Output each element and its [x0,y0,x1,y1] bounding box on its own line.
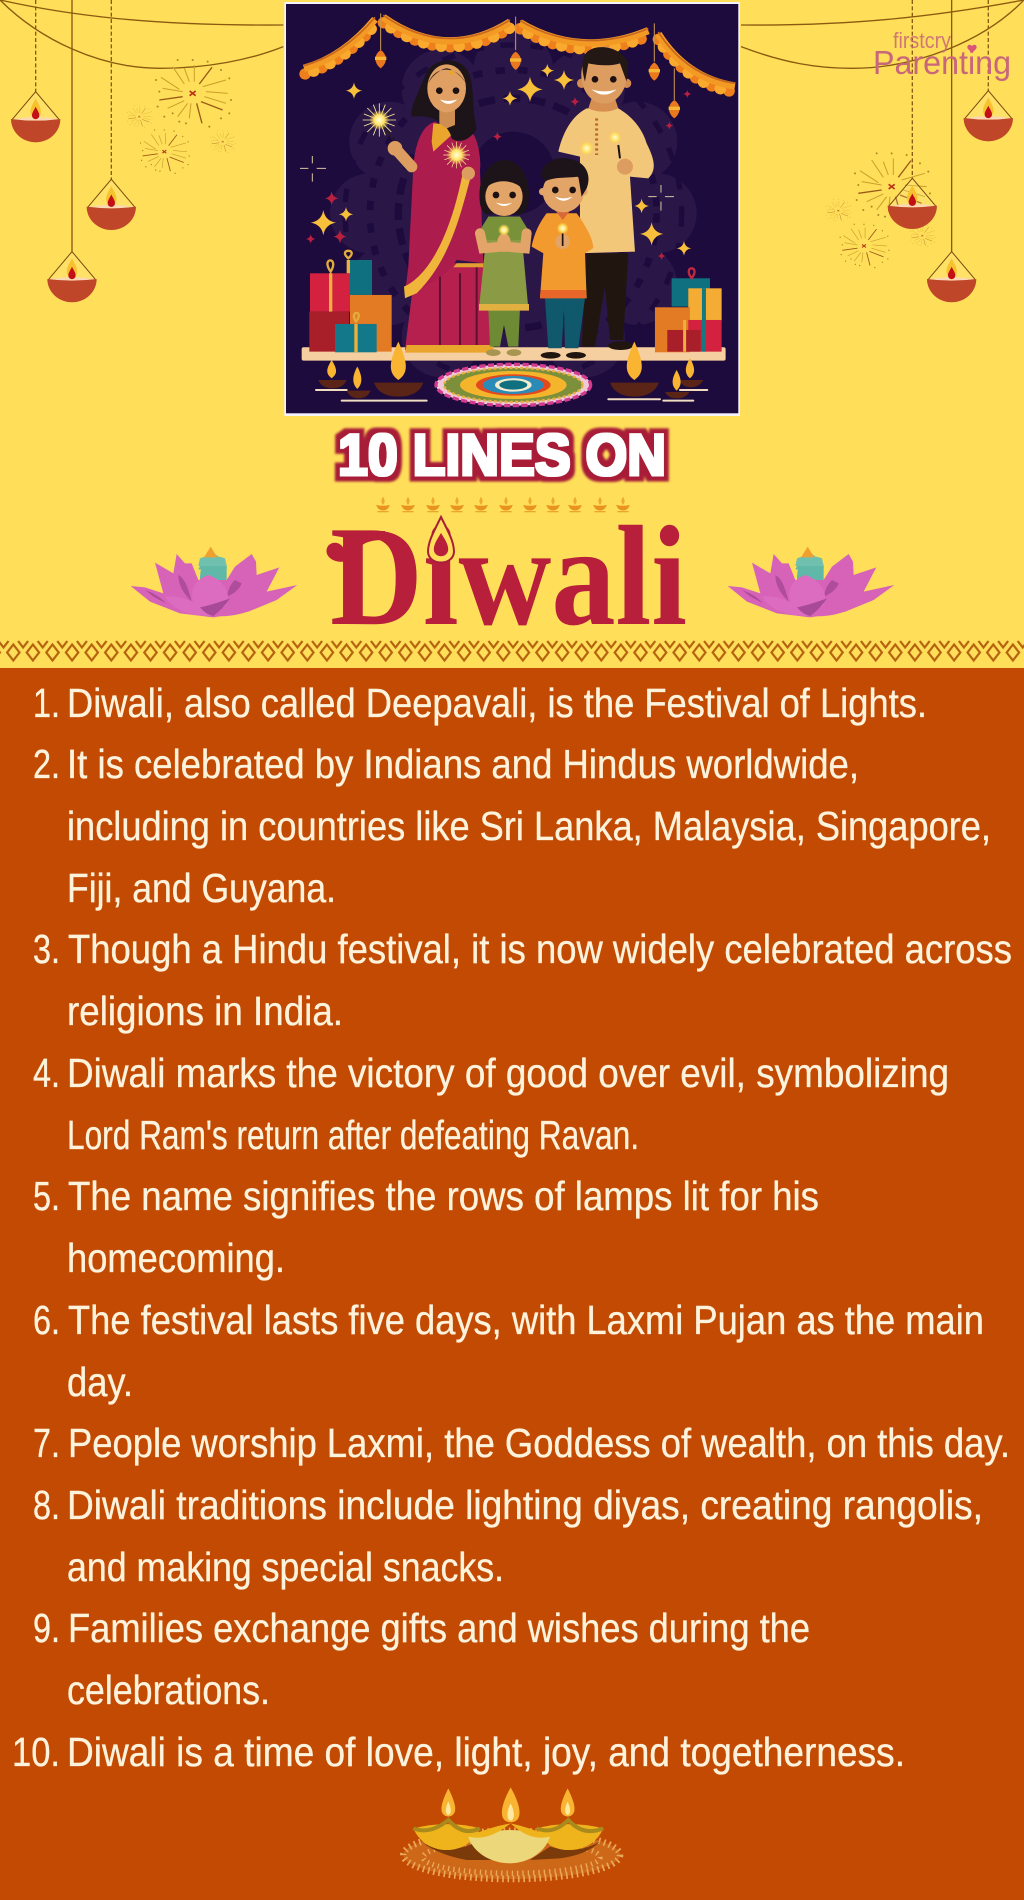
list: ten lines on Diwali: Diwali marks the victory of good over evil, symbolizing [67,1050,949,1096]
father [558,46,654,350]
list: ten lines on Diwali: religions in India. [67,988,343,1034]
right hanging lamps and fireworks [741,0,1024,302]
list: ten lines on Diwali: 10. [12,1729,60,1775]
list: ten lines on Diwali: 4. [33,1050,60,1096]
rangoli [436,364,591,406]
list: ten lines on Diwali: and making special snacks. [67,1544,504,1590]
heading: Diwali with flame: Diwali [330,497,687,655]
row of small diyas [376,497,630,512]
logo: FirstCry Parenting: firstcry [893,28,951,53]
lotus right [728,547,894,617]
logo: FirstCry Parenting [873,28,1011,81]
list: ten lines on Diwali: 3. [33,926,60,972]
stars [311,64,691,256]
list: ten lines on Diwali: Diwali is a time of love, light, joy, and togetherness. [67,1729,905,1775]
list: ten lines on Diwali: celebrations. [67,1667,270,1713]
list: ten lines on Diwali: 9. [33,1605,60,1651]
list: ten lines on Diwali: It is celebrated by Indians and Hindus worldwide, [67,741,859,787]
boy [532,158,593,359]
icon: three golden diyas [403,1787,620,1879]
gifts right [655,268,722,352]
heading: 10 LINES ON: 10 LINES ON [338,423,666,488]
logo: FirstCry Parenting: Parenting [873,44,1011,81]
gifts left [309,251,392,352]
list: ten lines on Diwali: Fiji, and Guyana. [67,865,336,911]
shelf [302,347,726,361]
mandala backdrop [330,30,697,382]
illustration: family celebrating Diwali [284,2,740,416]
lotus left [131,547,297,617]
list: ten lines on Diwali: 6. [33,1297,60,1343]
list: ten lines on Diwali: Families exchange gifts and wishes during the [68,1605,810,1651]
list: ten lines on Diwali: The name signifies the rows of lamps lit for his [68,1173,819,1219]
list: ten lines on Diwali: 1. [33,680,60,726]
list: ten lines on Diwali: day. [67,1359,133,1405]
left hanging lamps and fireworks [0,0,283,302]
list: ten lines on Diwali: 7. [33,1420,60,1466]
panel: brown list background [0,668,1024,1900]
list: ten lines on Diwali [12,680,1012,1775]
list: ten lines on Diwali: 2. [33,741,60,787]
list: ten lines on Diwali: 8. [33,1482,60,1528]
patterned border [0,640,1024,666]
girl [479,160,529,356]
mother [363,60,493,353]
list: ten lines on Diwali: Diwali, also called Deepavali, is the Festival of Lights. [67,680,927,726]
floor lamps [316,342,707,401]
bunting [304,15,735,92]
list: ten lines on Diwali: Lord Ram's return after defeating Ravan. [67,1112,639,1158]
list: ten lines on Diwali: 5. [33,1173,60,1219]
list: ten lines on Diwali: homecoming. [67,1235,285,1281]
